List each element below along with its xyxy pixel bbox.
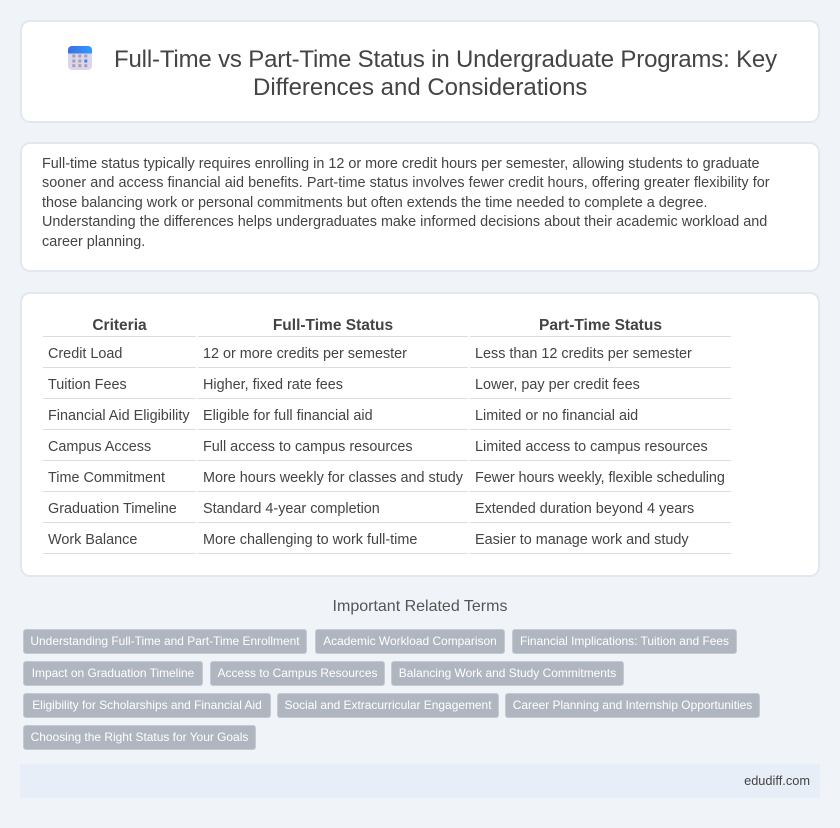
tag bbox=[315, 629, 505, 654]
tag bbox=[391, 661, 624, 686]
panel: header bbox=[20, 20, 820, 123]
row: work balance: Work Balance bbox=[48, 532, 137, 548]
row: campus access: Full access to campus resources bbox=[203, 439, 413, 455]
column headers: Full-Time Status bbox=[273, 317, 393, 334]
row: time commitment: More hours weekly for classes and study bbox=[203, 470, 463, 486]
tag: Balancing Work and Study Commitments bbox=[399, 666, 616, 680]
tag: Academic Workload Comparison bbox=[323, 634, 497, 648]
row: campus access: Limited access to campus resources bbox=[475, 439, 708, 455]
row: credit load: Less than 12 credits per semester bbox=[475, 346, 692, 362]
row: graduation timeline bbox=[48, 501, 694, 517]
comparison table bbox=[43, 317, 731, 554]
row: graduation timeline: Extended duration beyond 4 years bbox=[475, 501, 694, 517]
intro text: Full-time status typically requires enrolling in 12 or more credit hours per semester, allowing students to graduate bbox=[42, 156, 759, 172]
row: work balance: More challenging to work full-time bbox=[203, 532, 417, 548]
icon: calendar bbox=[68, 46, 92, 70]
tag: Career Planning and Internship Opportunities bbox=[513, 698, 752, 712]
tag bbox=[277, 693, 499, 718]
row: campus access: Campus Access bbox=[48, 439, 151, 455]
panel: comparison table bbox=[20, 292, 820, 577]
related term tags bbox=[23, 629, 760, 750]
intro text: career planning. bbox=[42, 234, 145, 250]
tag bbox=[23, 693, 271, 718]
tag bbox=[23, 661, 203, 686]
row: tuition fees: Tuition Fees bbox=[48, 377, 127, 393]
row: work balance: Easier to manage work and study bbox=[475, 532, 689, 548]
row: financial aid: Financial Aid Eligibility bbox=[48, 408, 190, 424]
tag bbox=[23, 725, 256, 750]
title bbox=[114, 46, 777, 101]
row: credit load: 12 or more credits per semester bbox=[203, 346, 407, 362]
panel: introduction bbox=[20, 142, 820, 272]
tag: Eligibility for Scholarships and Financial Aid bbox=[32, 698, 262, 712]
row: credit load bbox=[48, 346, 692, 362]
heading: related terms: Important Related Terms bbox=[333, 598, 507, 615]
tag: Social and Extracurricular Engagement bbox=[284, 698, 492, 712]
row: financial aid: Limited or no financial aid bbox=[475, 408, 638, 424]
row: credit load: Credit Load bbox=[48, 346, 122, 362]
tag bbox=[23, 629, 307, 654]
row: tuition fees: Lower, pay per credit fees bbox=[475, 377, 640, 393]
tag: Access to Campus Resources bbox=[218, 666, 377, 680]
footer source text: edudiff.com bbox=[744, 773, 810, 788]
row: tuition fees bbox=[48, 377, 640, 393]
tag bbox=[512, 629, 737, 654]
tag bbox=[210, 661, 385, 686]
row: tuition fees: Higher, fixed rate fees bbox=[203, 377, 343, 393]
row: financial aid: Eligible for full financial aid bbox=[203, 408, 373, 424]
column headers: Criteria bbox=[92, 317, 147, 334]
column headers bbox=[92, 317, 662, 334]
row: campus access bbox=[48, 439, 708, 455]
tag: Financial Implications: Tuition and Fees bbox=[520, 634, 729, 648]
row: time commitment: Time Commitment bbox=[48, 470, 165, 486]
row: financial aid bbox=[48, 408, 638, 424]
row: time commitment bbox=[48, 470, 725, 486]
footer bbox=[20, 764, 820, 798]
tag bbox=[505, 693, 760, 718]
intro text bbox=[42, 156, 770, 250]
tag: Choosing the Right Status for Your Goals bbox=[31, 730, 248, 744]
tag: Understanding Full-Time and Part-Time Enrollment bbox=[30, 634, 300, 648]
column headers: Part-Time Status bbox=[539, 317, 662, 334]
tag: Impact on Graduation Timeline bbox=[32, 666, 194, 680]
title: Full-Time vs Part-Time Status in Undergraduate Programs: Key bbox=[114, 46, 777, 73]
intro text: Understanding the differences helps undergraduates make informed decisions about their academic workload and bbox=[42, 214, 767, 230]
intro text: sooner and access financial aid benefits. Part-time status involves fewer credit hours, offering greater flexibility for bbox=[42, 175, 770, 191]
row: graduation timeline: Graduation Timeline bbox=[48, 501, 177, 517]
intro text: those balancing work or personal commitments but often extends the time needed to complete a degree. bbox=[42, 194, 708, 210]
row: graduation timeline: Standard 4-year completion bbox=[203, 501, 380, 517]
row: work balance bbox=[48, 532, 689, 548]
row: time commitment: Fewer hours weekly, flexible scheduling bbox=[475, 470, 725, 486]
title: Differences and Considerations bbox=[253, 74, 587, 101]
